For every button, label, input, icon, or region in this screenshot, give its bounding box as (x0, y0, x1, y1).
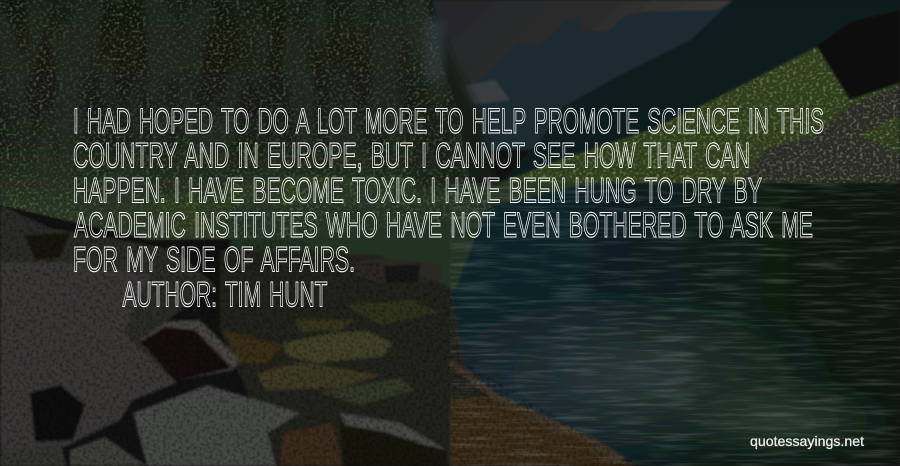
light grey stone (133, 385, 300, 466)
water green patch (680, 375, 900, 465)
mossy stones (295, 320, 355, 332)
dark bottom-right rock (340, 413, 447, 466)
watermark: quotessayings.net (750, 433, 864, 449)
hillside foliage texture (500, 45, 900, 185)
mountain snow streaks (452, 80, 510, 105)
quote text (73, 101, 824, 280)
shoreline brown rock (450, 397, 635, 466)
rocky scree (740, 85, 900, 183)
upper dark rock (25, 233, 70, 260)
green shallows (230, 200, 490, 290)
quote line 5: FOR MY SIDE OF AFFAIRS. (73, 240, 355, 280)
bottom-left stones (0, 445, 66, 466)
forest shadow bands (0, 0, 520, 240)
dark central rock (140, 320, 240, 380)
water light patch (440, 290, 840, 460)
distant mountains (440, 0, 800, 150)
hazy mountain patch (424, 20, 444, 80)
lake water (300, 183, 900, 466)
forest foliage texture (0, 0, 520, 240)
water ripples (450, 183, 900, 466)
amber stone (223, 330, 283, 363)
dark forested slope (500, 0, 900, 183)
sky (380, 0, 780, 110)
dark tree block on right (815, 10, 900, 100)
shore foliage strip (110, 170, 640, 238)
olive stone shallows (220, 250, 560, 466)
fallen log (450, 362, 622, 460)
left forest (0, 0, 434, 241)
olive stone (283, 331, 393, 363)
big left boulder (0, 205, 215, 450)
author attribution: AUTHOR: TIM HUNT (122, 274, 328, 314)
rock grain (0, 205, 640, 466)
boulder shadow (30, 385, 85, 442)
tree edge softening (410, 0, 496, 190)
brown stone bottom (280, 423, 343, 466)
brown stone (257, 362, 380, 390)
small brown rock (352, 258, 442, 285)
green hillside (500, 47, 900, 183)
